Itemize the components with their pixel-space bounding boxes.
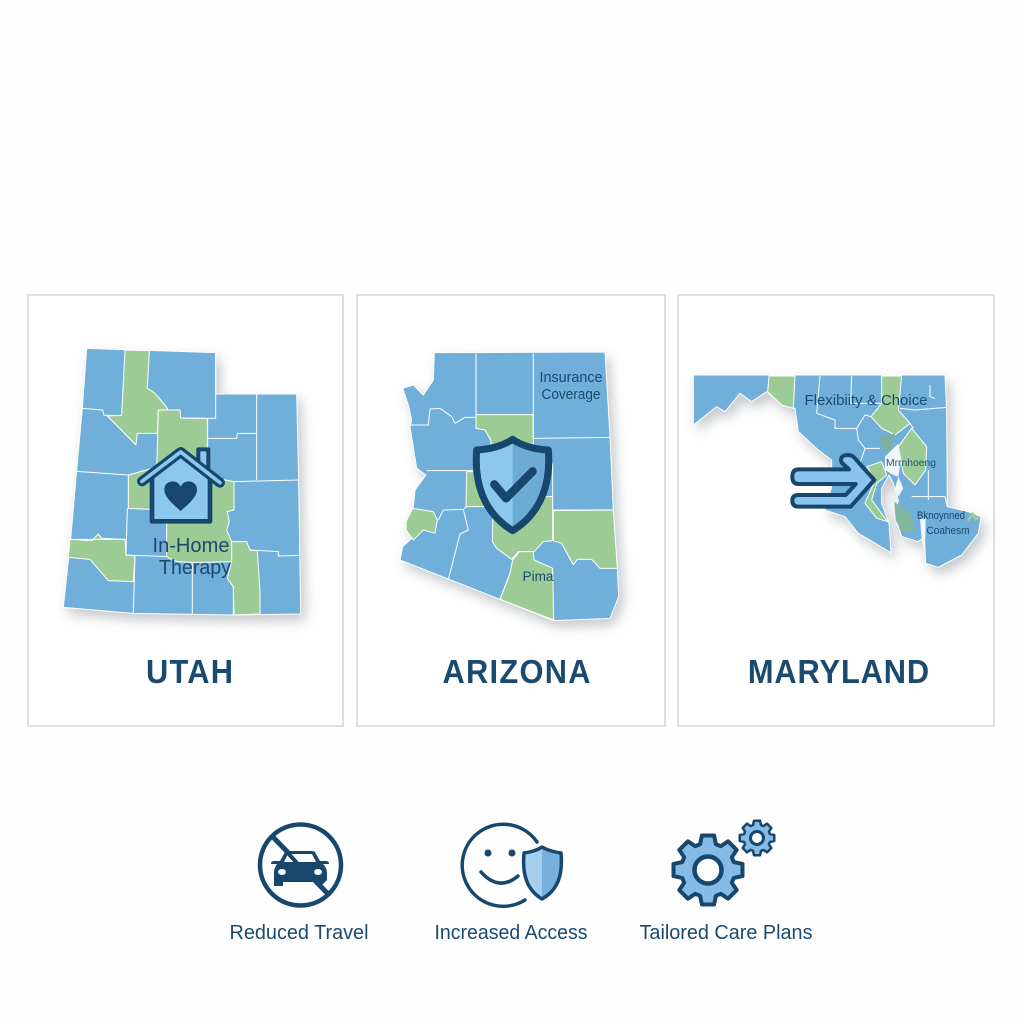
- caption: Increased Access: [434, 922, 588, 944]
- label: Insurance Coverage: Insurance: [540, 370, 602, 386]
- icon: gears: [674, 821, 774, 904]
- caption: Reduced Travel: [230, 922, 368, 944]
- map: Utah counties: [63, 348, 301, 615]
- heading: MARYLAND: MARYLAND: [748, 653, 929, 690]
- heading: UTAH: UTAH: [146, 653, 233, 690]
- label: Pima: Pima: [522, 568, 554, 584]
- map: Maryland counties: [693, 375, 981, 567]
- panel: Arizona: [357, 295, 665, 726]
- label: Insurance Coverage: Coverage: [542, 387, 600, 403]
- icon: no car: [260, 824, 341, 906]
- icon: house with heart: [142, 449, 220, 521]
- label: In-Home Therapy: Therapy: [159, 557, 231, 579]
- benefit: Tailored Care Plans: [640, 821, 812, 944]
- label: county names lower: Bknoynned: [917, 510, 965, 522]
- label: county names lower: [917, 510, 970, 537]
- label: In-Home Therapy: In-Home: [152, 535, 230, 557]
- icon: double arrow: [792, 455, 874, 507]
- benefit: Reduced Travel: [230, 824, 368, 944]
- label: Flexibility and Choice: Flexibiity & Choice: [804, 392, 928, 409]
- heading: ARIZONA: ARIZONA: [442, 653, 591, 690]
- panel: Utah: [28, 295, 343, 726]
- label: Insurance Coverage: [540, 370, 602, 403]
- benefit: Increased Access: [434, 824, 588, 944]
- icon: shield with check: [476, 439, 549, 531]
- map: Arizona counties: [400, 352, 619, 621]
- label: county names lower: Coahesm: [926, 525, 970, 537]
- caption: Tailored Care Plans: [640, 922, 812, 944]
- icon: smile with shield: [462, 824, 561, 906]
- label: In-Home Therapy: [152, 535, 231, 579]
- label: county name: Mrrnhoeng: [886, 458, 936, 469]
- panel: Maryland: [678, 295, 994, 726]
